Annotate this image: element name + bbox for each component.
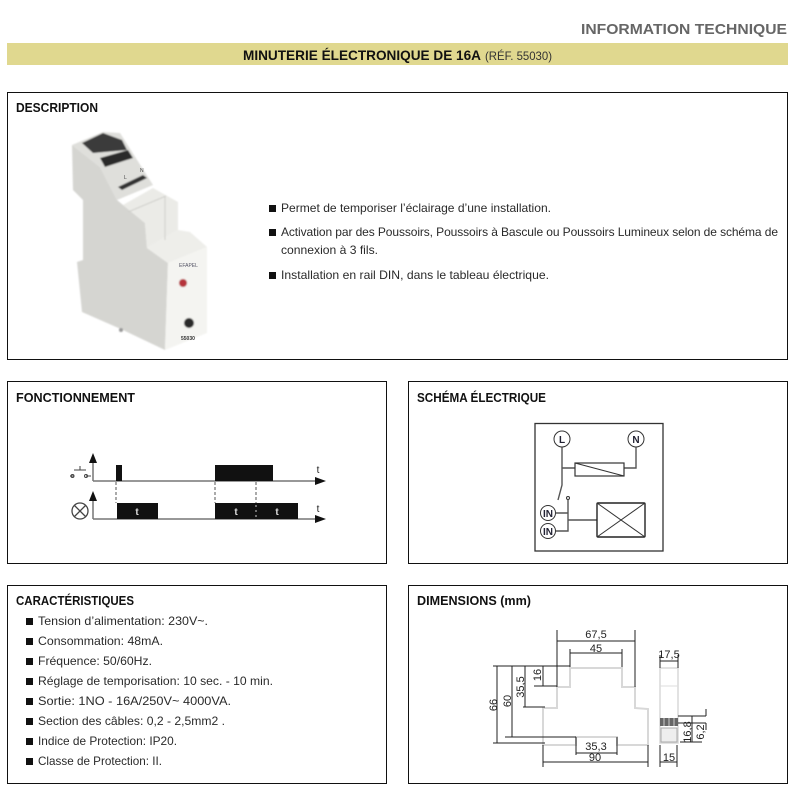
wiring diagram: IN: [543, 527, 553, 538]
heading: dimensions: DIMENSIONS (mm): [417, 594, 531, 608]
heading: schéma électrique: SCHÉMA ÉLECTRIQUE: [417, 390, 546, 405]
diagram: front profile dimensions: 67,5: [585, 629, 607, 641]
heading: caractéristiques: CARACTÉRISTIQUES: [16, 593, 134, 608]
panel: caractéristiques: [8, 586, 386, 784]
bullet list: description: Permet de temporiser l’éclairage d’une installation.: [281, 201, 551, 215]
diagram: side profile dimensions: 15: [663, 752, 675, 764]
diagram: front profile dimensions: 66: [488, 699, 500, 711]
diagram: front profile dimensions: 45: [590, 643, 602, 655]
wiring diagram: IN: [543, 509, 553, 520]
diagram: front profile dimensions: 16: [532, 669, 544, 681]
bullet list: characteristics: Consommation: 48mA.: [38, 634, 163, 648]
title banner: MINUTERIE ÉLECTRONIQUE DE 16A: [243, 47, 481, 63]
panel: description: [8, 92, 788, 360]
diagram: side profile dimensions: 6,2: [695, 724, 707, 740]
bullet list: characteristics: Réglage de temporisation: 10 sec. - 10 min.: [38, 674, 273, 688]
diagram: front profile dimensions: 35,3: [585, 741, 607, 753]
bullet list: characteristics: Tension d’alimentation: 230V~.: [38, 614, 208, 628]
diagram: side profile dimensions: [658, 649, 707, 767]
image: timer module: 55030: [181, 336, 195, 342]
timing chart: t: [275, 507, 279, 518]
bullet list: characteristics: Sortie: 1NO - 16A/250V~ 4000VA.: [38, 694, 231, 708]
panel: schéma électrique: [408, 382, 788, 564]
bullet list: description: Activation par des Poussoirs, Poussoirs à Bascule ou Poussoirs Lumineux selon de schéma de: [281, 225, 778, 239]
bullet list: description: Installation en rail DIN, dans le tableau électrique.: [281, 268, 549, 282]
title banner: [7, 43, 788, 65]
diagram: front profile dimensions: 90: [589, 752, 601, 764]
timing chart: t: [234, 507, 238, 518]
timing chart: t: [317, 465, 320, 476]
diagram: front profile dimensions: 60: [502, 695, 514, 707]
title banner: (RÉF. 55030): [485, 48, 552, 63]
panel: fonctionnement: [8, 382, 386, 564]
timing chart: [89, 453, 326, 523]
bullet list: characteristics: Section des câbles: 0,2 - 2,5mm2 .: [38, 714, 225, 728]
bullet list: characteristics: Classe de Protection: II.: [38, 754, 162, 768]
bullet list: description: connexion à 3 fils.: [281, 243, 378, 257]
image: timer module: EFAPEL: [179, 263, 198, 269]
panel: dimensions: [408, 586, 788, 784]
icon: push button: [70, 466, 91, 478]
wiring diagram: [535, 424, 663, 551]
timing chart: t: [317, 504, 320, 515]
section label: INFORMATION TECHNIQUE: [581, 21, 787, 38]
image: timer module: L: [124, 175, 127, 181]
diagram: front profile dimensions: [488, 629, 648, 767]
bullet list: characteristics: Indice de Protection: IP20.: [38, 734, 177, 748]
icon: lamp: [72, 503, 88, 519]
image: timer module: [72, 132, 207, 350]
bullet list: description: [269, 201, 778, 282]
timing chart: t: [135, 507, 139, 518]
bullet list: characteristics: Fréquence: 50/60Hz.: [38, 654, 152, 668]
image: timer module: N: [140, 168, 144, 174]
heading: description: DESCRIPTION: [16, 101, 98, 115]
bullet list: characteristics: [26, 614, 273, 768]
wiring diagram: N: [632, 435, 640, 446]
wiring diagram: L: [559, 435, 565, 446]
heading: fonctionnement: FONCTIONNEMENT: [16, 391, 135, 405]
diagram: side profile dimensions: 17,5: [658, 649, 680, 661]
diagram: front profile dimensions: 35,5: [515, 676, 527, 698]
diagram: side profile dimensions: 16,8: [682, 721, 694, 743]
